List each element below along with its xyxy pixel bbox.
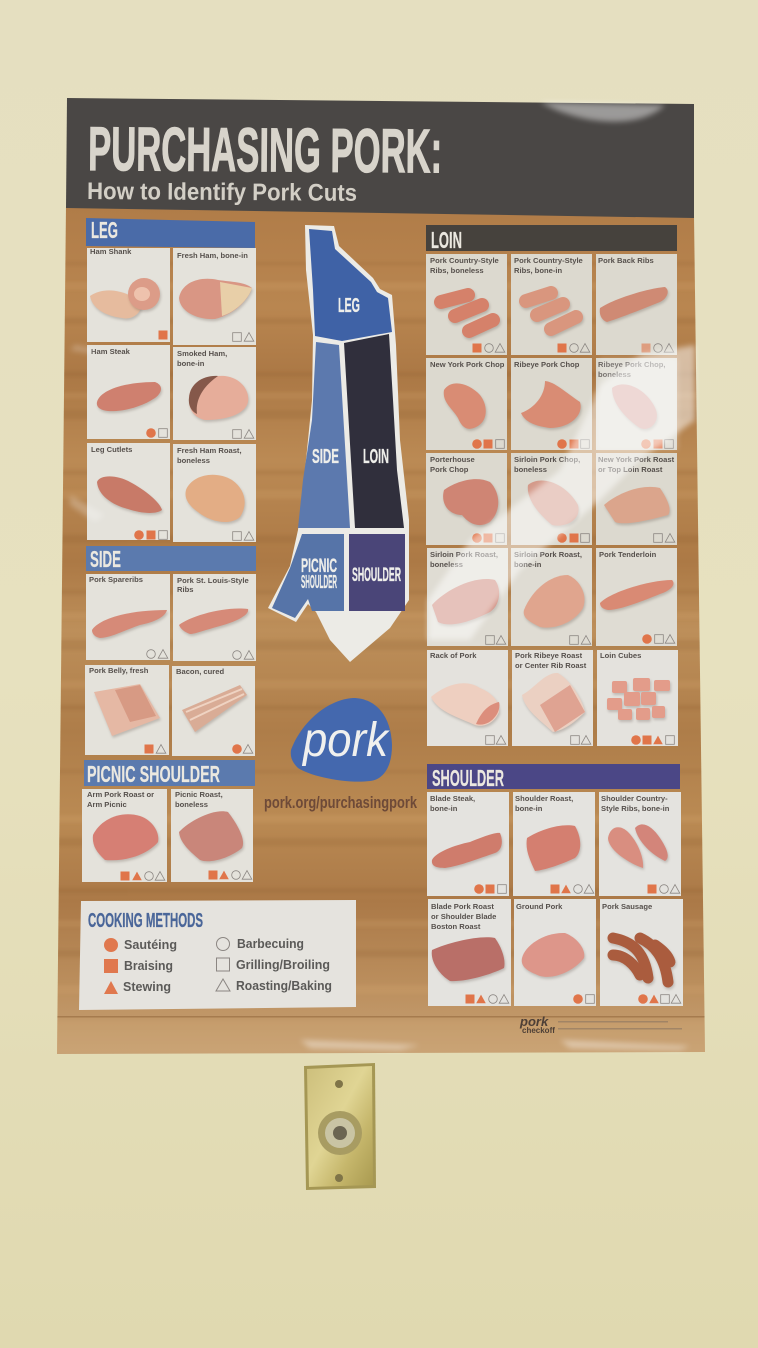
card: ribeye pork chop, boneless: Ribeye Pork Chop, [598,360,666,369]
card: fresh ham, bone-in: Fresh Ham, bone-in [177,251,248,260]
region: side: SIDE [312,446,339,468]
card: blade pork roast or shoulder blade boston roast: or Shoulder Blade [431,912,496,921]
card: ribeye pork chop: Ribeye Pork Chop [514,360,580,369]
card: rack of pork: Rack of Pork [430,651,477,660]
card: loin cubes: Loin Cubes [600,651,641,660]
card: blade pork roast or shoulder blade boston roast: Boston Roast [431,922,481,931]
shoulder heading [427,764,680,791]
card: pork sausage [600,899,683,1006]
title: PURCHASING PORK: [88,115,442,186]
card: country-style ribs, bone-in [511,254,592,355]
panel: picnic shoulder [82,760,255,882]
header band [66,98,694,218]
legend: braising: Braising [124,958,173,973]
card: blade steak, bone-in [427,792,509,896]
subtitle: How to Identify Pork Cuts [87,178,357,207]
diagram: pork carcass map [268,225,409,662]
legend: roasting/baking: Roasting/Baking [236,978,332,993]
card: fresh ham, bone-in [173,248,256,345]
card: pork tenderloin [596,548,677,646]
card: pork sausage: Pork Sausage [602,902,652,911]
card: country-style ribs, boneless: Pork Country-Style [430,256,499,265]
side heading: SIDE [90,546,121,572]
card: pork belly, fresh [85,665,169,755]
card: leg cutlets: Leg Cutlets [91,445,132,454]
card: ribeye pork chop, boneless [596,358,677,450]
card: pork ribeye roast or center rib roast: or Center Rib Roast [515,661,587,670]
card: shoulder roast, bone-in: Shoulder Roast, [515,794,573,803]
legend: stewing [104,979,171,994]
card: blade steak, bone-in: Blade Steak, [430,794,475,803]
card: new york pork roast or top loin roast: or Top Loin Roast [598,465,663,474]
card: pork ribeye roast or center rib roast [512,650,593,746]
card: ham steak: Ham Steak [91,347,131,356]
card: smoked ham, bone-in [173,347,256,440]
card: arm pork roast or arm picnic: Arm Picnic [87,800,127,809]
leg heading: LEG [91,217,118,243]
legend heading: COOKING METHODS [88,910,203,932]
card: porterhouse pork chop: Porterhouse [430,455,475,464]
pork checkoff logo and fine print: checkoff [522,1026,555,1035]
loin heading: LOIN [431,227,462,253]
card: pork back ribs [596,254,677,355]
card: shoulder roast, bone-in: bone-in [515,804,543,813]
card: country-style ribs, boneless: Ribs, boneless [430,266,484,275]
card: loin cubes [597,650,678,746]
card: ground pork [514,899,596,1006]
card: shoulder country-style ribs, bone-in: Shoulder Country- [601,794,668,803]
card: sirloin pork roast, boneless: Sirloin Pork Roast, [430,550,498,559]
card: arm pork roast or arm picnic: Arm Pork Roast or [87,790,154,799]
card: blade pork roast or shoulder blade boston roast: Blade Pork Roast [431,902,494,911]
card: picnic roast, boneless [171,789,253,882]
doorbell plate [304,1063,376,1190]
region: leg: LEG [338,295,360,317]
card: ribeye pork chop, boneless: boneless [598,370,631,379]
card: fresh ham roast, boneless: Fresh Ham Roast, [177,446,242,455]
card: sirloin pork roast, bone-in: Sirloin Pork Roast, [514,550,582,559]
region: leg [309,229,392,341]
card: porterhouse pork chop: Pork Chop [430,465,469,474]
loin heading [426,225,677,253]
region: side [298,342,350,528]
panel: leg [86,217,256,542]
region: picnic shoulder [272,534,344,618]
card: arm pork roast or arm picnic [82,789,167,882]
card: bacon, cured: Bacon, cured [176,667,224,676]
card: picnic roast, boneless: boneless [175,800,208,809]
card: sirloin pork roast, boneless [427,548,508,646]
panel: shoulder [427,764,683,1006]
legend: stewing: Stewing [123,979,171,994]
card: pork st. louis-style ribs: Ribs [177,585,193,594]
card: sirloin pork roast, bone-in [511,548,592,646]
card: porterhouse pork chop [426,453,507,545]
card: pork spareribs: Pork Spareribs [89,575,143,584]
card: sirloin pork roast, boneless: boneless [430,560,463,569]
shoulder heading: SHOULDER [432,765,504,791]
card: picnic roast, boneless: Picnic Roast, [175,790,223,799]
card: fresh ham roast, boneless: boneless [177,456,210,465]
legend: grilling/broiling: Grilling/Broiling [236,957,330,972]
card: blade pork roast or shoulder blade boston roast [428,899,511,1006]
card: smoked ham, bone-in: bone-in [177,359,205,368]
card: new york pork roast or top loin roast [596,453,677,545]
card: country-style ribs, bone-in: Pork Country-Style [514,256,583,265]
region: picnic shoulder: PICNIC [301,556,337,577]
diagram: pork carcass map: SHOULDER [352,565,401,586]
card: ham shank: Ham Shank [90,247,132,256]
card: new york pork chop [426,358,507,450]
wood grain [57,320,704,1018]
region: shoulder [349,534,405,611]
card: country-style ribs, bone-in: Ribs, bone-in [514,266,562,275]
card: bacon, cured [172,666,255,756]
card: country-style ribs, boneless [426,254,507,355]
card: smoked ham, bone-in: Smoked Ham, [177,349,227,358]
card: ham steak [87,345,170,439]
leg heading [86,217,255,248]
card: pork tenderloin: Pork Tenderloin [599,550,657,559]
card: pork back ribs: Pork Back Ribs [598,256,654,265]
card: fresh ham roast, boneless [173,444,256,542]
card: pork st. louis-style ribs [173,574,256,661]
card: leg cutlets [87,443,170,540]
website url: pork.org/purchasingpork [264,793,417,812]
card: blade steak, bone-in: bone-in [430,804,458,813]
card: sirloin pork chop, boneless [511,453,592,545]
card: shoulder country-style ribs, bone-in: Style Ribs, bone-in [601,804,670,813]
region: loin [344,334,404,528]
card: ribeye pork chop [511,358,592,450]
legend: braising [104,958,173,973]
diagram: pork carcass map: SHOULDER [301,572,337,592]
side heading [86,546,256,572]
logo: pork [291,698,392,782]
legend: sautéing: Sautéing [124,937,177,952]
card: sirloin pork chop, boneless: Sirloin Pork Chop, [514,455,580,464]
card: shoulder roast, bone-in [513,792,595,896]
card: pork ribeye roast or center rib roast: Pork Ribeye Roast [515,651,583,660]
card: sirloin pork roast, bone-in: bone-in [514,560,542,569]
picnic shoulder heading: PICNIC SHOULDER [87,761,220,787]
legend: barbecuing: Barbecuing [237,936,304,951]
logo: pork: pork [301,714,391,767]
panel: side [85,546,256,756]
card: pork belly, fresh: Pork Belly, fresh [89,666,149,675]
plastic glare [70,102,695,1050]
card: shoulder country-style ribs, bone-in [599,792,681,896]
card: ham shank [87,247,170,342]
panel: cooking methods legend [79,900,356,1010]
card: new york pork roast or top loin roast: New York Pork Roast [598,455,675,464]
card: rack of pork [427,650,508,746]
panel: loin [426,225,678,746]
card: pork spareribs [86,574,170,660]
region: loin: LOIN [363,446,389,468]
card: sirloin pork chop, boneless: boneless [514,465,547,474]
poster board [57,206,705,1054]
card: pork st. louis-style ribs: Pork St. Louis-Style [177,576,249,585]
card: ground pork: Ground Pork [516,902,563,911]
pork checkoff logo and fine print [519,1014,682,1035]
card: new york pork chop: New York Pork Chop [430,360,505,369]
pork checkoff logo and fine print: pork [519,1014,549,1029]
